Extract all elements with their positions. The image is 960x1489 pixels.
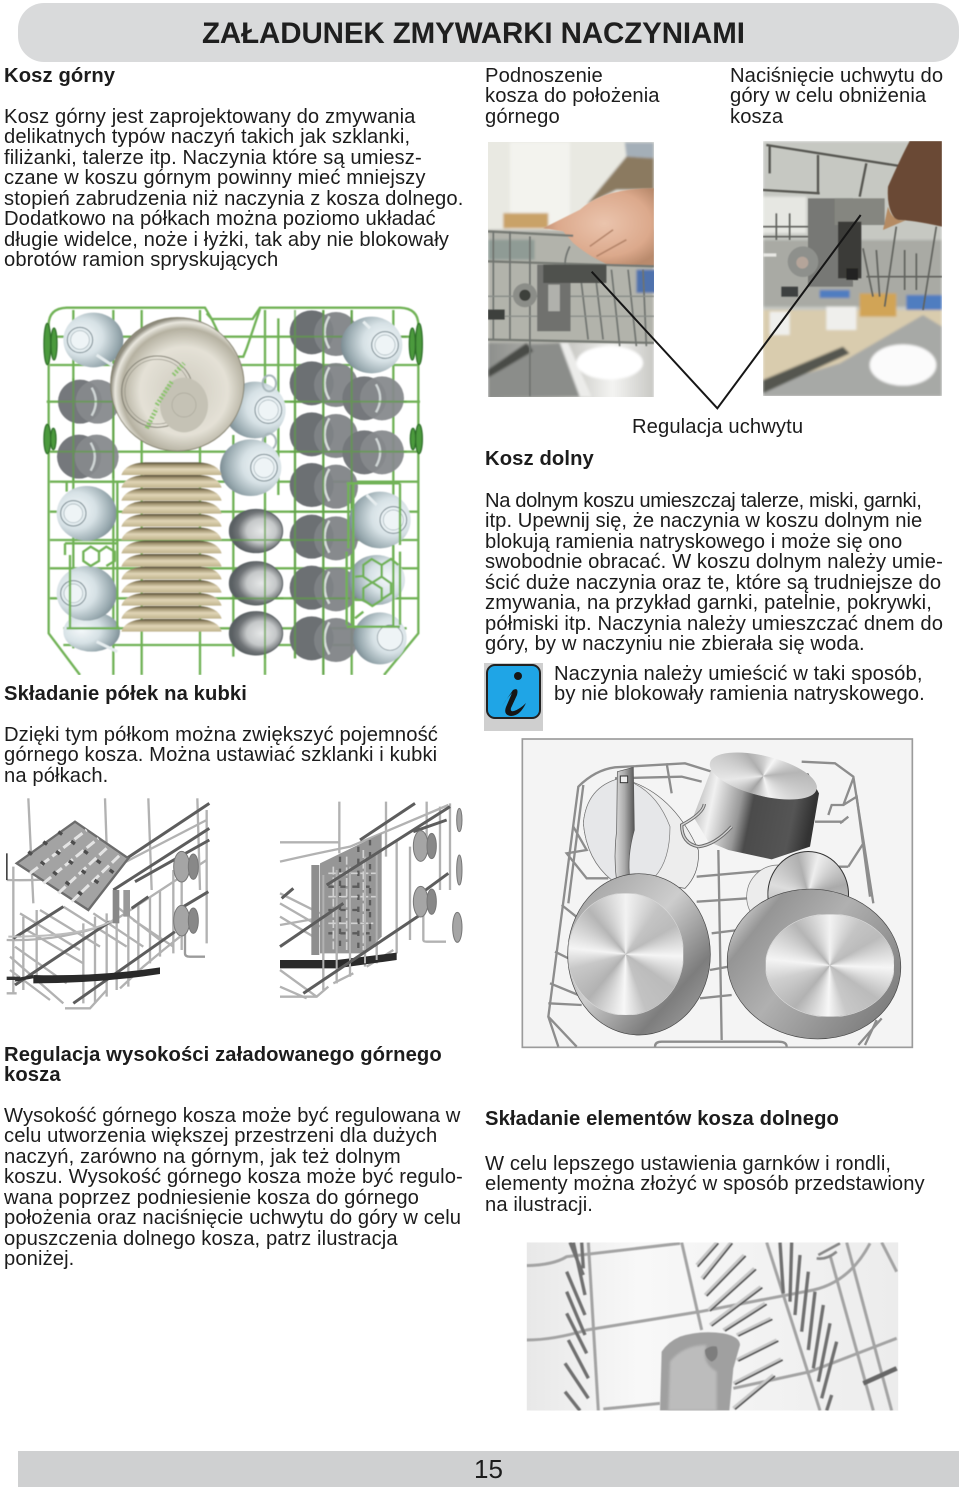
text block: Kosz górny description: długie widelce, noże i łyżki, tak aby nie blokowały: [4, 229, 449, 251]
photo: pressing the handle: [763, 141, 942, 396]
heading: Składanie elementów kosza dolnego: Składanie elementów kosza dolnego: [485, 1108, 839, 1130]
text block: Kosz dolny description: góry, by w naczyniu nie zbierała się woda.: [485, 633, 865, 655]
text block: Kosz dolny description: Na dolnym koszu umieszczaj talerze, miski, garnki,: [485, 490, 922, 512]
right rack rollers: [413, 808, 462, 942]
text block: Kosz górny description: stopień zabrudzenia niż naczynia z kosza dolnego.: [4, 188, 463, 210]
centre tines: [697, 1242, 781, 1408]
text block: Kosz górny description: filiżanki, talerze itp. Naczynia które są umiesz-: [4, 147, 422, 169]
text block: Kosz dolny description: itp. Upewnij się, że naczynia w koszu dolnym nie: [485, 510, 922, 532]
basket wire frame: [47, 308, 420, 675]
text block: Kosz górny description: delikatnych typów naczyń takich jak szklanki,: [4, 126, 410, 148]
left tines: [565, 1242, 588, 1411]
page number: 15: [474, 1454, 503, 1484]
text block: basket height adjustment: [4, 1105, 463, 1270]
text block: Kosz dolny description: zmywania, na przykład garnki, patelnie, pokrywki,: [485, 592, 932, 614]
text block: Kosz dolny description: półmiski itp. Naczynia należy umieszczać dnem do: [485, 613, 943, 635]
image frame: [522, 739, 912, 1047]
text block: basket height adjustment: położenia oraz naciśnięcie uchwytu do góry w celu: [4, 1207, 461, 1229]
caption: pressing the handle: [730, 65, 943, 128]
large bowl: [111, 318, 244, 451]
text block: cup shelves: na półkach.: [4, 765, 108, 787]
wires seen through the glasses: [58, 310, 407, 675]
text block: Kosz dolny description: swobodnie obracać. W koszu dolnym należy umie-: [485, 551, 943, 573]
caption: raising the basket: Podnoszenie: [485, 65, 603, 87]
photo: raising the upper basket: [488, 142, 654, 397]
text block: folding lower basket elements: [485, 1153, 925, 1216]
title: ZAŁADUNEK ZMYWARKI NACZYNIAMI: [202, 17, 745, 50]
lower basket wires: [548, 762, 882, 1047]
text block: basket height adjustment: koszu. Wysokość górnego kosza może być regulo-: [4, 1166, 463, 1188]
text block: Kosz górny description: Dodatkowo na półkach można poziomo układać: [4, 208, 436, 230]
frying pan left: [568, 874, 710, 1035]
callout lines: handle adjustment: [591, 214, 862, 410]
caption: pressing the handle: Naciśnięcie uchwytu do: [730, 65, 943, 87]
heading: Składanie półek na kubki: Składanie półek na kubki: [4, 683, 247, 705]
text block: folding lower basket elements: W celu lepszego ustawienia garnków i rondli,: [485, 1153, 891, 1175]
stack of plates: [121, 462, 222, 632]
left rack: folded-down shelf grid: [6, 822, 160, 983]
caption: raising the basket: górnego: [485, 106, 560, 128]
text block: basket height adjustment: wana poprzez podniesienie kosza do górnego: [4, 1187, 419, 1209]
text block: basket height adjustment: Wysokość górnego kosza może być regulowana w: [4, 1105, 460, 1127]
hand: [660, 1332, 740, 1411]
text block: Kosz górny description: Kosz górny jest zaprojektowany do zmywania: [4, 106, 416, 128]
text block: Kosz górny description: [4, 106, 463, 271]
text block: Kosz dolny description: [485, 490, 943, 655]
heading: Regulacja wysokości załadowanego górnego kosza: [4, 1044, 442, 1086]
heading: Kosz dolny: Kosz dolny: [485, 448, 594, 470]
lid with handle: [583, 767, 698, 888]
illustration: upper basket loaded with cups, glasses and plates: [42, 306, 424, 675]
text block: Kosz dolny description: blokują ramienia natryskowego i może się ono: [485, 531, 902, 553]
pot: [682, 743, 822, 859]
heading: Regulacja wysokości załadowanego górnego kosza: Regulacja wysokości załadowanego górnego: [4, 1044, 442, 1066]
text block: cup shelves: Dzięki tym półkom można zwiększyć pojemność: [4, 724, 438, 746]
text block: Kosz dolny description: ścić duże naczynia oraz te, które są trudniejsze do: [485, 572, 941, 594]
illustration: cup shelves folded and unfolded: [6, 798, 462, 1010]
left rack: shelf open: [7, 798, 209, 1008]
upright glasses: centre column: [229, 509, 283, 655]
frying pan right: [717, 878, 911, 1050]
horizontal wires: [527, 1242, 897, 1411]
note text: [554, 663, 925, 705]
text block: Kosz górny description: czane w koszu górnym powinny mieć mniejszy: [4, 167, 426, 189]
label: Regulacja uchwytu: Regulacja uchwytu: [632, 416, 803, 438]
caption: raising the basket: kosza do położenia: [485, 85, 660, 107]
photo: folding lower basket tines by hand: [526, 1242, 898, 1411]
right rack: shelf folded up: [280, 802, 450, 998]
caption: pressing the handle: góry w celu obniżenia: [730, 85, 926, 107]
right tines: [780, 1242, 837, 1411]
dark glasses: right column: [290, 310, 404, 662]
basket roller wheels: [44, 323, 422, 454]
caption: pressing the handle: kosza: [730, 106, 783, 128]
text block: basket height adjustment: opuszczenia dolnego kosza, patrz ilustracja: [4, 1228, 398, 1250]
small lid: [747, 851, 849, 938]
header bar with title: [18, 3, 959, 62]
left rack rollers: [174, 851, 198, 936]
cup shelves: [62, 482, 400, 628]
cups: [57, 313, 411, 664]
text block: basket height adjustment: celu utworzenia większej przestrzeni dla dużych: [4, 1125, 437, 1147]
heading: Regulacja wysokości załadowanego górnego kosza: kosza: [4, 1064, 61, 1086]
text block: cup shelves: [4, 724, 438, 787]
text block: folding lower basket elements: na ilustracji.: [485, 1194, 593, 1216]
illustration: lower basket loaded with pots and pans: [522, 738, 914, 1048]
text block: cup shelves: górnego kosza. Można ustawiać szklanki i kubki: [4, 744, 437, 766]
text block: Kosz górny description: obrotów ramion spryskujących: [4, 249, 278, 271]
dark glasses: left column: [57, 380, 120, 479]
text block: folding lower basket elements: elementy można złożyć w sposób przedstawiony: [485, 1173, 925, 1195]
text block: basket height adjustment: naczyń, zarówno na górnym, jak też dolnym: [4, 1146, 401, 1168]
caption: raising the basket: [485, 65, 660, 128]
footer bar with page number: [18, 1451, 959, 1487]
note text: Naczynia należy umieścić w taki sposób,: [554, 663, 923, 685]
text block: basket height adjustment: poniżej.: [4, 1248, 74, 1270]
icon: information: [484, 663, 543, 731]
heading: Kosz górny: Kosz górny: [4, 65, 115, 87]
note text: by nie blokowały ramienia natryskowego.: [554, 683, 925, 705]
